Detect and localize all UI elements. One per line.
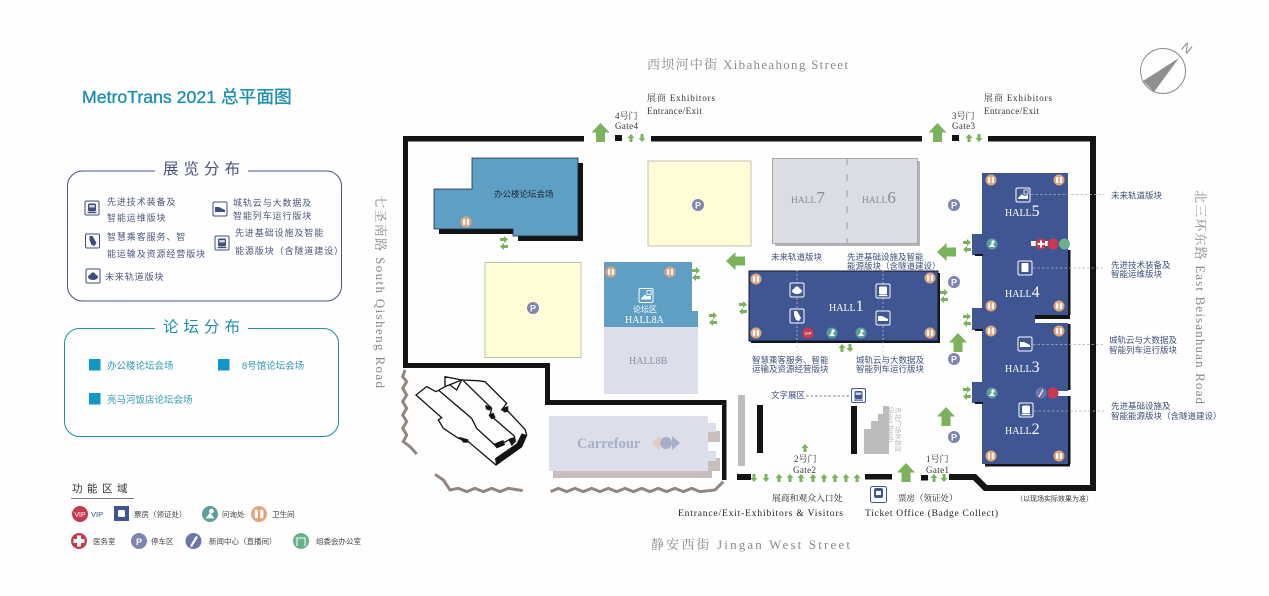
icon: compass: N (1178, 39, 1195, 57)
title: MetroTrans 2021 总平面图 (82, 87, 292, 107)
bottom entrance captions (678, 492, 1093, 519)
legend: news centre (186, 533, 276, 549)
hall 1 module labels: 智慧乘客服务、智能 (752, 355, 829, 365)
gate labels: 3号门 (952, 110, 975, 121)
small direction arrows (500, 134, 982, 482)
road label: north street: 西坝河中街 Xibaheahong Street (647, 57, 848, 72)
halls 7 and 6: HALL7 (791, 188, 825, 207)
right side module labels: 未来轨道版块 (1111, 190, 1163, 200)
icon: passenger service module (86, 234, 100, 248)
legend: information desk: 问询处 (222, 509, 245, 519)
right side module labels (1109, 190, 1222, 421)
parking lot: west: P (530, 304, 536, 314)
panel: exhibition distribution (68, 160, 344, 301)
legend: information desk (202, 506, 245, 522)
building: Carrefour (549, 416, 720, 478)
hall 1 (749, 270, 940, 376)
icon: infrastructure module (215, 236, 229, 250)
exhibition list text: 智能列车运行版块 (233, 210, 312, 221)
big entrance arrows (592, 123, 967, 482)
bottom entrance captions: Entrance/Exit-Exhibitors & Visitors (678, 509, 843, 519)
hall 8A: 论坛区 (633, 304, 657, 314)
forum venue names (107, 360, 304, 406)
bottom entrance captions: 票房（领证处） (898, 493, 958, 503)
right side module labels: 先进基础设施及 (1111, 401, 1171, 411)
hall 1: HALL1 (829, 298, 864, 315)
halls 2 to 5 (972, 173, 1072, 466)
legend: VIP: VIP (74, 512, 86, 519)
exhibit area: bars and stairs: 东北广场休息区 (894, 407, 903, 453)
wavy boundary lines (403, 370, 723, 492)
panel: forum distribution (64, 318, 338, 436)
icon: ticket office (870, 486, 886, 502)
exhibition list text: 能源版块（含隧道建设） (235, 245, 344, 256)
legend: organizer office (293, 533, 361, 549)
gate labels: Gate3 (952, 121, 976, 131)
forum venue names: 亮马河饭店论坛会场 (107, 394, 193, 406)
parking markers east side: P (951, 278, 957, 288)
right side module labels: 智能运维版块 (1111, 269, 1163, 279)
hall 8B: HALL8B (629, 356, 668, 367)
legend: first aid: 医务室 (93, 536, 116, 546)
exhibit area label and icon (771, 388, 866, 403)
parking markers east side: P (951, 432, 957, 442)
right side module leader lines (806, 194, 1106, 411)
legend: parking: 停车区 (151, 536, 174, 546)
panel: functional area legend (71, 482, 361, 549)
legend: news centre: 新闻中心（直播间） (209, 536, 276, 546)
hall 1 module labels: 能源版块（含隧道建设） (847, 261, 941, 271)
legend: VIP (72, 506, 103, 522)
halls 2 to 5: HALL3 (1005, 359, 1040, 376)
parking markers east side (948, 199, 960, 443)
forum venue names: 办公楼论坛会场 (107, 360, 174, 372)
exhibit area: bars and stairs: Glass Booth (887, 407, 894, 443)
building: hotel outline (416, 377, 527, 465)
exhibition list text: 未来轨道版块 (105, 271, 164, 282)
halls 7 and 6 (772, 158, 920, 246)
right side module labels: 智能能源版块（含隧道建设） (1111, 411, 1222, 421)
legend heading: 功能区域 (72, 482, 132, 495)
gate labels: 1号门 (926, 453, 949, 464)
road label: south street: 静安西街 Jingan West Street (651, 537, 850, 552)
bottom entrance captions: Ticket Office (Badge Collect) (865, 508, 998, 519)
icon: compass (1140, 39, 1195, 94)
heading: forum distribution: 论坛分布 (163, 318, 245, 336)
forum venue names: 8号馆论坛会场 (242, 360, 304, 372)
icon: equipment module (85, 201, 99, 215)
exhibition list text: 能运输及资源经营版块 (107, 248, 206, 259)
gate labels: 4号门 (615, 110, 638, 121)
legend: VIP: VIP (91, 510, 103, 519)
hall 8B (604, 327, 698, 394)
hall 1 module labels: 智能列车运行版块 (856, 364, 925, 374)
bottom entrance captions: 展商和观众入口处 (772, 492, 843, 503)
hall 8A (604, 262, 698, 327)
legend: organizer office: 组委会办公室 (316, 536, 361, 546)
hall 1 module labels: 未来轨道版块 (771, 252, 823, 262)
exhibit area: bars and stairs (738, 395, 903, 466)
legend: parking: P (136, 537, 142, 547)
parking markers east side: P (951, 200, 957, 210)
halls 7 and 6: HALL6 (862, 188, 896, 207)
building: office forum venue (434, 158, 583, 241)
road label: west road: 七圣南路 South Qisheng Road (373, 195, 388, 389)
legend: first aid (71, 533, 116, 549)
gate labels: Entrance/Exit (984, 106, 1039, 116)
building: Carrefour: Carrefour (577, 436, 641, 452)
legend: ticket office (114, 506, 186, 521)
legend: restroom (251, 506, 294, 522)
parking lot: west (485, 262, 581, 358)
exhibition list text: 城轨云与大数据及 (233, 197, 312, 208)
gate labels: Entrance/Exit (647, 106, 702, 116)
parking markers east side: P (951, 354, 957, 364)
gate labels: 展商 Exhibitors (984, 92, 1052, 103)
gate labels (615, 92, 1052, 475)
venue outer walls (403, 135, 1096, 491)
gate labels: 展商 Exhibitors (647, 92, 715, 103)
legend: parking (131, 533, 174, 549)
icon: cloud and data module (213, 202, 227, 216)
road label: east road: 北三环东路 East Beisanhuan Road (1193, 190, 1208, 404)
icon: future rail module (86, 269, 100, 283)
right side module labels: 先进技术装备及 (1111, 260, 1171, 270)
exhibit area label and icon: 文字展区 (771, 390, 806, 400)
hall 1: VIP (804, 331, 812, 336)
gate labels: Gate4 (615, 121, 638, 131)
gate labels: 2号门 (794, 453, 817, 464)
gate labels: Gate1 (926, 465, 949, 475)
building: office forum venue: 办公楼论坛会场 (494, 189, 554, 199)
forum legend squares (89, 359, 230, 404)
right side module labels: 城轨云与大数据及 (1109, 335, 1178, 345)
halls 2 to 5: HALL5 (1005, 203, 1040, 220)
legend: restroom: 卫生间 (272, 509, 294, 519)
right side module labels: 智能列车运行版块 (1109, 345, 1178, 355)
halls 2 to 5: HALL4 (1005, 284, 1040, 301)
halls 2 to 5: HALL2 (1005, 421, 1040, 438)
bottom entrance captions: （以现场实际效果为准） (1016, 494, 1093, 503)
exhibition list text: 智能运维版块 (107, 212, 166, 223)
parking lot: north: P (695, 200, 701, 210)
exhibition list text (105, 196, 344, 282)
exhibition list text: 先进技术装备及 (107, 196, 176, 207)
hall 1 module labels: 运输及资源经营版块 (752, 364, 829, 374)
exhibition list text: 智慧乘客服务、智 (107, 231, 186, 242)
parking lot: north (648, 161, 751, 246)
hall 8A: HALL8A (625, 315, 665, 326)
heading: exhibition distribution: 展览分布 (163, 160, 245, 178)
legend: ticket office: 票房（领证处） (134, 509, 186, 519)
exhibition list text: 先进基础设施及智能 (235, 227, 324, 238)
hall 1 module labels: 先进基础设施及智能 (847, 252, 924, 262)
gate labels: Gate2 (793, 465, 816, 475)
hall 1 module labels (752, 252, 941, 374)
hall 1 module labels: 城轨云与大数据及 (856, 355, 925, 365)
